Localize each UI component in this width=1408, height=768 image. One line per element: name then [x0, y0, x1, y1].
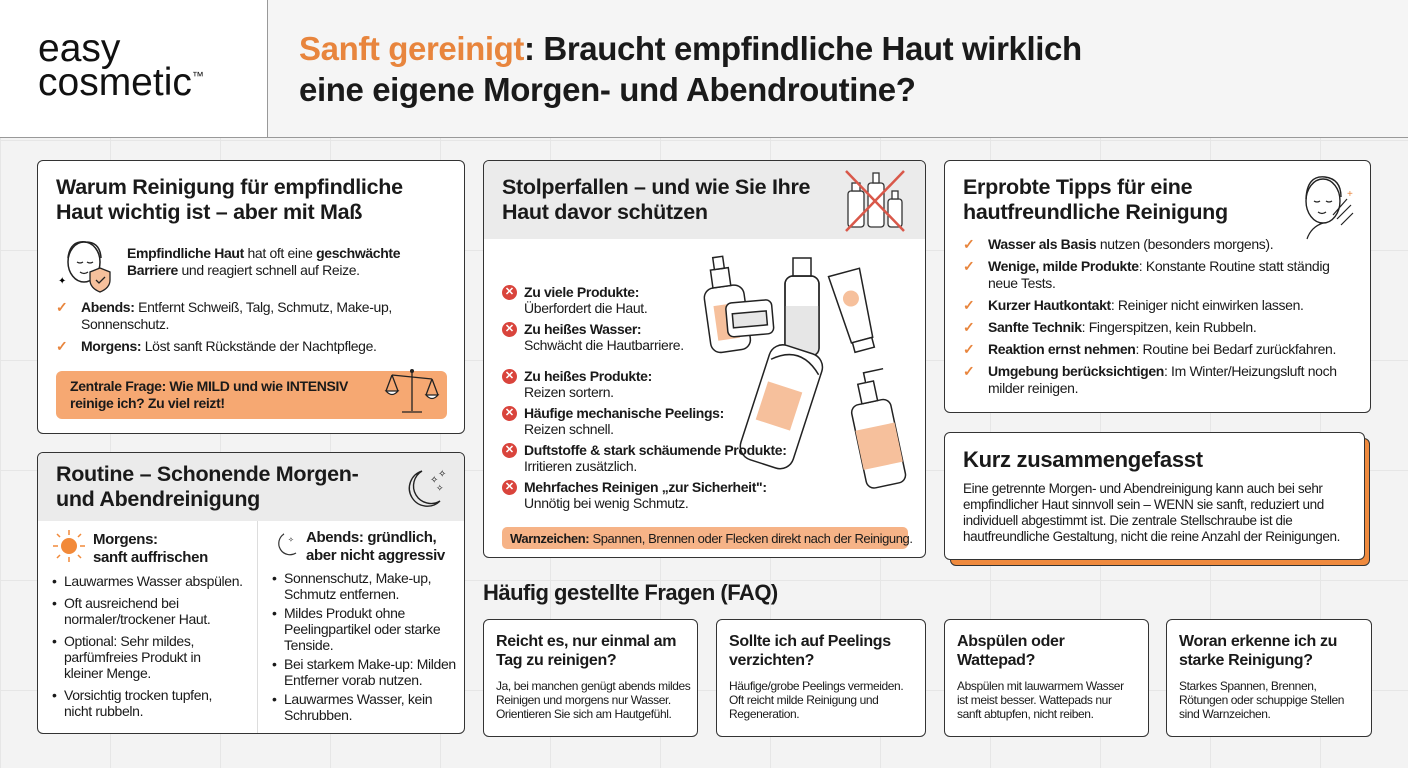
panel: why cleansing: Sonnenschutz.: [81, 316, 169, 332]
FAQ card 3: Wattepad?: [957, 652, 1035, 669]
panel: summary: empfindlicher Haut sinnvoll sein – WENN sie sanft, reduziert und: [963, 497, 1324, 512]
list: pitfalls: ✕: [505, 481, 514, 493]
FAQ card 4: sind Warnzeichen.: [1179, 707, 1270, 721]
panel: tips: Kurzer Hautkontakt: Reiniger nicht einwirken lassen.: [988, 297, 1304, 313]
FAQ card 2: Regeneration.: [729, 707, 799, 721]
FAQ card 4: Rötungen oder schuppige Stellen: [1179, 693, 1344, 707]
icon: face with shield: ✦: [58, 276, 66, 287]
list: pitfalls: ✕: [505, 407, 514, 419]
panel: why cleansing: ✓: [56, 338, 67, 354]
panel: routine: Lauwarmes Wasser abspülen.: [64, 573, 243, 589]
panel: routine: kleiner Menge.: [64, 665, 151, 681]
panel: routine: Peelingpartikel oder starke: [284, 621, 440, 637]
icon: face touching: +: [1347, 189, 1353, 200]
callout: central question: reinige ich? Zu viel reizt!: [70, 395, 225, 411]
list: pitfalls: Häufige mechanische Peelings:: [524, 405, 724, 421]
panel: routine: Optional: Sehr mildes,: [64, 633, 194, 649]
icon: moon: ✧: [430, 475, 438, 486]
panel: routine: Abends: gründlich,: [306, 529, 436, 546]
FAQ card 1: Reicht es, nur einmal am: [496, 633, 676, 650]
icon: moon: ✧: [436, 483, 444, 493]
panel: tips: ✓: [963, 363, 974, 379]
panel: why cleansing: Abends: Entfernt Schweiß, Talg, Schmutz, Make-up,: [81, 299, 392, 315]
illustration: scattered bottles: [704, 256, 906, 489]
FAQ card 2: [716, 619, 926, 737]
header: [0, 0, 1408, 138]
panel: routine: parfümfreies Produkt in: [64, 649, 201, 665]
FAQ card 3: [944, 619, 1149, 737]
list: pitfalls: Unnötig bei wenig Schmutz.: [524, 495, 688, 511]
panel: why cleansing: Morgens: Löst sanft Rückstände der Nachtpflege.: [81, 338, 377, 354]
panel: why cleansing: Warum Reinigung für empfindliche: [56, 175, 403, 199]
FAQ card 4: starke Reinigung?: [1179, 652, 1313, 669]
panel: tips: [944, 160, 1371, 413]
panel: tips: ✓: [963, 258, 974, 274]
panel: tips: hautfreundliche Reinigung: [963, 200, 1228, 224]
panel: tips: Reaktion ernst nehmen: Routine bei Bedarf zurückfahren.: [988, 341, 1336, 357]
panel: tips: Erprobte Tipps für eine: [963, 175, 1192, 199]
panel: pitfalls: Haut davor schützen: [502, 200, 708, 224]
list: pitfalls: Reizen sortern.: [524, 384, 614, 400]
icon: moon: ✧: [438, 469, 446, 480]
FAQ card 3: Abspülen oder: [957, 633, 1064, 650]
logo: easy: [38, 27, 120, 70]
callout: warning signs: [502, 527, 908, 549]
icon: face touching: [1305, 176, 1354, 240]
panel: why cleansing: Haut wichtig ist – aber mit Maß: [56, 200, 362, 224]
title: eine eigene Morgen- und Abendroutine?: [299, 71, 916, 108]
panel: pitfalls: Stolperfallen – und wie Sie Ihre: [502, 175, 810, 199]
list: pitfalls: Mehrfaches Reinigen „zur Sicherheit":: [524, 479, 767, 495]
FAQ card 2: verzichten?: [729, 652, 814, 669]
panel: routine: Mildes Produkt ohne: [284, 605, 405, 621]
FAQ card 3: Abspülen mit lauwarmem Wasser: [957, 679, 1124, 693]
column: morning: [52, 530, 243, 719]
panel: pitfalls: [483, 160, 926, 558]
panel: summary: Kurz zusammengefasst: [963, 447, 1203, 472]
panel: summary: [944, 432, 1370, 566]
panel: routine: [37, 452, 465, 734]
list: pitfalls: [502, 284, 787, 511]
panel: routine: Morgens:: [93, 531, 158, 548]
title: Sanft gereinigt: Braucht empfindliche Haut wirklich: [299, 30, 1082, 67]
icon: small moon: [278, 534, 296, 556]
logo: cosmetic™: [38, 61, 204, 104]
FAQ heading: Häufig gestellte Fragen (FAQ): [483, 580, 778, 605]
panel: tips: ✓: [963, 297, 974, 313]
panel: routine: Entferner vorab nutzen.: [284, 672, 422, 688]
panel: routine: Bei starkem Make-up: Milden: [284, 656, 456, 672]
icon: sun: [53, 530, 85, 562]
list: pitfalls: Irritieren zusätzlich.: [524, 458, 637, 474]
FAQ card 2: Oft reicht milde Reinigung und: [729, 693, 878, 707]
panel: why cleansing: Empfindliche Haut hat oft eine geschwächte: [127, 245, 400, 261]
FAQ card 4: Woran erkenne ich zu: [1179, 633, 1337, 650]
FAQ card 1: Reinigen und morgens nur Wasser.: [496, 693, 671, 707]
icon: moon: [408, 469, 446, 507]
callout: central question: [56, 371, 447, 419]
icon: scale: [384, 369, 440, 413]
list: pitfalls: ✕: [505, 370, 514, 382]
panel: routine: Lauwarmes Wasser, kein: [284, 691, 432, 707]
panel: routine: und Abendreinigung: [56, 487, 260, 511]
list: pitfalls: Schwächt die Hautbarriere.: [524, 337, 684, 353]
panel: tips: ✓: [963, 236, 974, 252]
panel: summary: hautfreundliche Gestaltung, nicht die reine Anzahl der Reinigungen.: [963, 529, 1340, 544]
panel: routine: aber nicht aggressiv: [306, 547, 445, 564]
FAQ card 4: [1166, 619, 1372, 737]
panel: tips: ✓: [963, 319, 974, 335]
callout: warning signs: Warnzeichen: Spannen, Brennen oder Flecken direkt nach der Reinigung.: [510, 531, 913, 546]
panel: tips: ✓: [963, 341, 974, 357]
FAQ card 2: Häufige/grobe Peelings vermeiden.: [729, 679, 903, 693]
list: pitfalls: Reizen schnell.: [524, 421, 614, 437]
list: pitfalls: Zu heißes Wasser:: [524, 321, 641, 337]
panel: why cleansing: ✓: [56, 299, 67, 315]
list: pitfalls: ✕: [505, 444, 514, 456]
FAQ card 2: Sollte ich auf Peelings: [729, 633, 891, 650]
callout: central question: Zentrale Frage: Wie MILD und wie INTENSIV: [70, 378, 348, 394]
panel: tips: Wasser als Basis nutzen (besonders morgens).: [988, 236, 1273, 252]
panel: routine: Schrubben.: [284, 707, 352, 723]
panel: routine: Tenside.: [284, 637, 333, 653]
list: pitfalls: Überfordert die Haut.: [524, 300, 647, 316]
list: pitfalls: Zu viele Produkte:: [524, 284, 639, 300]
FAQ card 3: sanft abtupfen, nicht reiben.: [957, 707, 1094, 721]
title: [299, 30, 1082, 108]
panel: summary: Eine getrennte Morgen- und Abendreinigung kann auch bei sehr: [963, 481, 1323, 496]
panel: routine: Schmutz entfernen.: [284, 586, 399, 602]
FAQ card 1: Tag zu reinigen?: [496, 652, 616, 669]
panel: routine: nicht rubbeln.: [64, 703, 143, 719]
panel: routine: sanft auffrischen: [93, 549, 208, 566]
panel: tips: Sanfte Technik: Fingerspitzen, kein Rubbeln.: [988, 319, 1256, 335]
icon: face with shield: [58, 241, 111, 293]
FAQ card 1: Ja, bei manchen genügt abends mildes: [496, 679, 690, 693]
panel: tips: Wenige, milde Produkte: Konstante Routine statt ständig: [988, 258, 1330, 274]
panel: routine: Sonnenschutz, Make-up,: [284, 570, 431, 586]
FAQ card 3: ist meist besser. Wattepads nur: [957, 693, 1112, 707]
icon: crossed bottles: [845, 170, 905, 232]
list: pitfalls: Zu heißes Produkte:: [524, 368, 652, 384]
panel: routine: Oft ausreichend bei: [64, 595, 179, 611]
panel: routine: Routine – Schonende Morgen-: [56, 462, 358, 486]
list: pitfalls: ✕: [505, 286, 514, 298]
panel: tips: milder reinigen.: [988, 380, 1078, 396]
panel: why cleansing: [37, 160, 465, 434]
panel: routine: Vorsichtig trocken tupfen,: [64, 687, 212, 703]
list: pitfalls: Duftstoffe & stark schäumende Produkte:: [524, 442, 787, 458]
panel: summary: individuell abgestimmt ist. Die zentrale Stellschraube ist die: [963, 513, 1292, 528]
list: pitfalls: ✕: [505, 323, 514, 335]
logo: [0, 0, 268, 137]
FAQ card 1: [483, 619, 698, 737]
FAQ card 1: Orientieren Sie sich am Hautgefühl.: [496, 707, 671, 721]
panel: tips: neue Tests.: [988, 275, 1056, 291]
icon: small moon: ✧: [288, 536, 294, 544]
FAQ card 4: Starkes Spannen, Brennen,: [1179, 679, 1316, 693]
panel: why cleansing: Barriere und reagiert schnell auf Reize.: [127, 262, 360, 278]
panel: routine: normaler/trockener Haut.: [64, 611, 210, 627]
panel: tips: Umgebung berücksichtigen: Im Winter/Heizungsluft noch: [988, 363, 1337, 379]
column: evening: [272, 529, 456, 723]
